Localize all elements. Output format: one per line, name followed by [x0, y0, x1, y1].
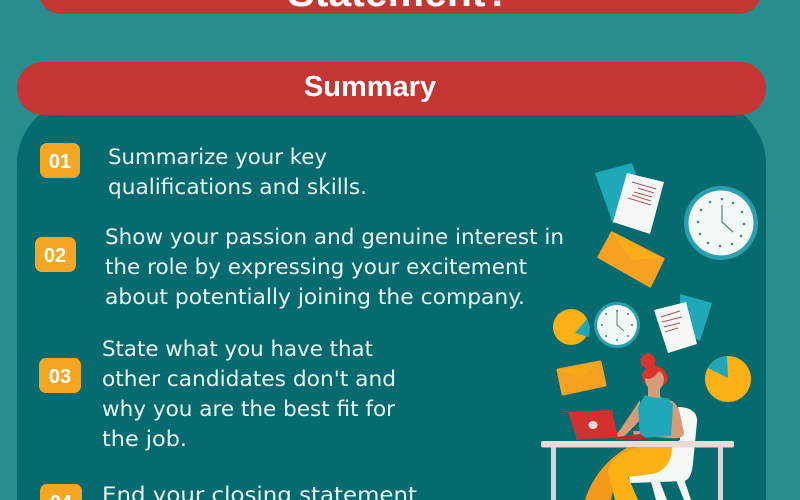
heading: summary: Summary: [304, 71, 436, 103]
item 01: Summarize your key: [108, 145, 327, 169]
item 02: [35, 225, 564, 309]
item 03: [39, 337, 396, 451]
desk: [541, 441, 734, 500]
face: [645, 371, 664, 391]
title banner: [40, 0, 760, 15]
arms: [615, 400, 640, 440]
item 02: about potentially joining the company.: [105, 285, 525, 309]
icon: document lower: [654, 294, 712, 353]
trousers front leg: [608, 447, 672, 500]
trousers back leg: [585, 447, 640, 500]
hair: [642, 365, 668, 388]
item 01: qualifications and skills.: [108, 175, 367, 199]
panel: summary content: [17, 100, 766, 500]
icon: large pie chart: [705, 356, 751, 402]
icon: small envelope: [558, 362, 605, 394]
item 02: 02: [44, 245, 66, 267]
illustration: woman at desk: [541, 354, 734, 500]
icon: document top: [595, 163, 664, 234]
chair: [628, 407, 697, 483]
item 02: the role by expressing your excitement: [105, 255, 527, 279]
item 03: why you are the best fit for: [102, 397, 395, 421]
icon: large clock: [684, 186, 758, 260]
icon: small clock: [594, 302, 640, 348]
torso: [638, 395, 673, 438]
item 03: State what you have that: [102, 337, 373, 361]
laptop: [568, 410, 648, 440]
hair bun: [640, 354, 656, 368]
icon: small pie chart: [553, 309, 590, 345]
item 01: [40, 143, 367, 199]
item 03: 03: [49, 366, 71, 388]
icon: large envelope: [599, 232, 663, 286]
item 03: the job.: [102, 427, 187, 451]
heading: summary: [17, 62, 766, 115]
item 01: 01: [49, 151, 71, 173]
neck and face: [642, 385, 666, 402]
item 02: Show your passion and genuine interest in: [105, 225, 564, 249]
item 03: other candidates don't and: [102, 367, 396, 391]
